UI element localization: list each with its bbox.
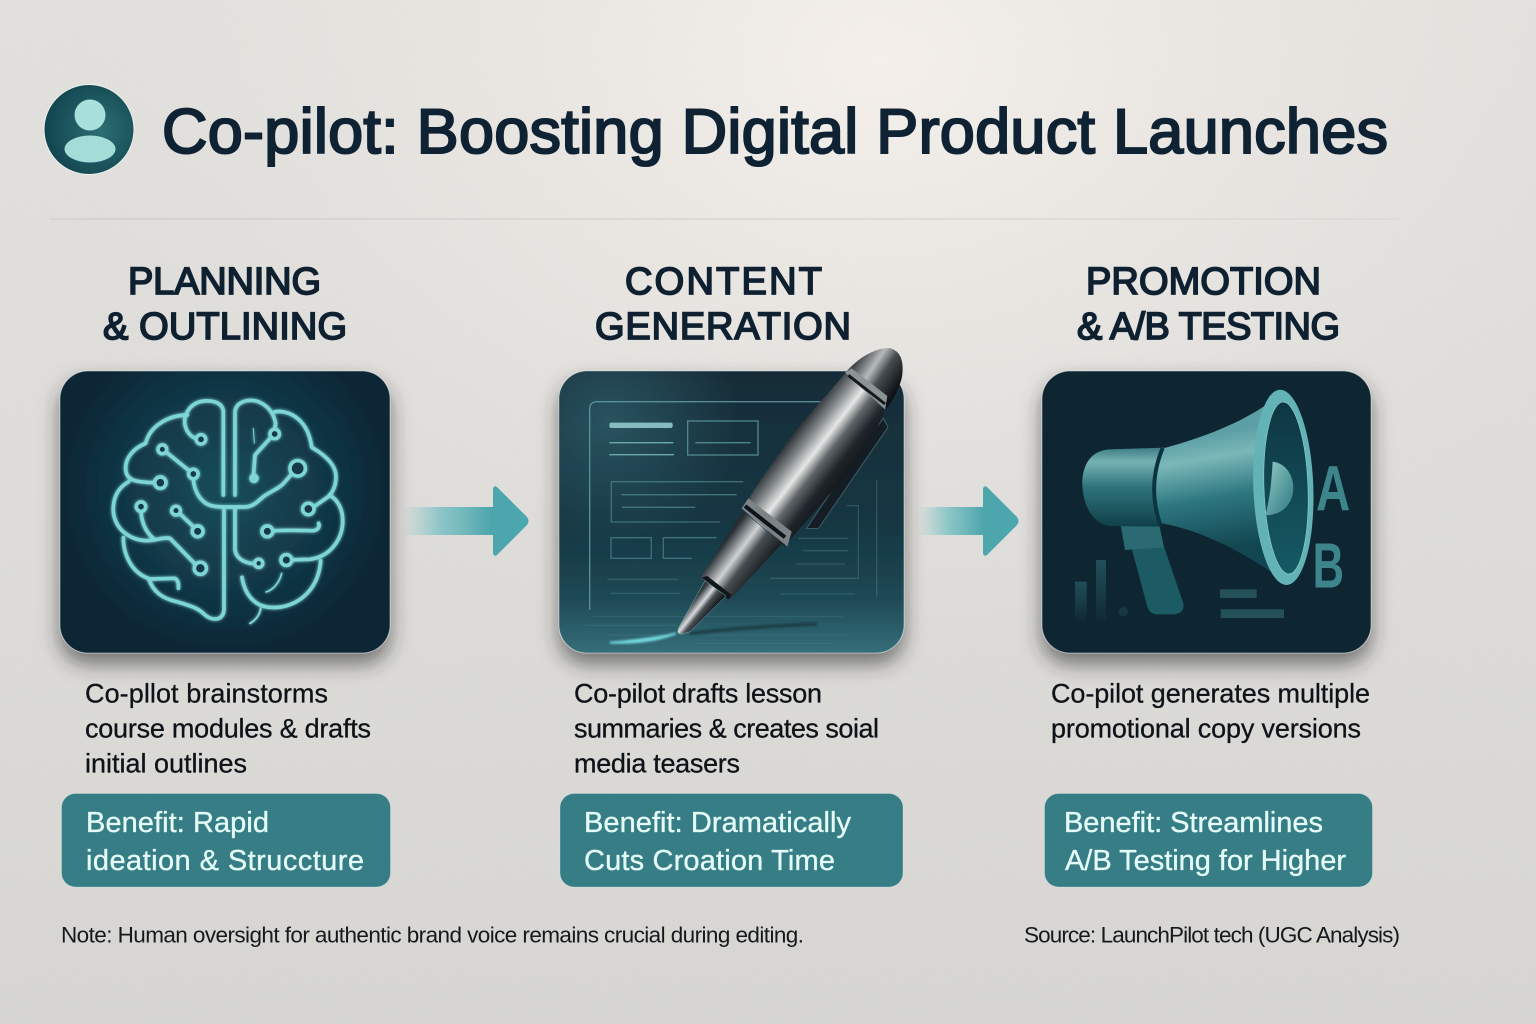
- A/B letters: [1313, 453, 1350, 601]
- title: Co-pilot: Boosting Digital Product Launches: [162, 97, 1388, 167]
- heading: planning: & OUTLINING: [103, 306, 347, 348]
- A/B letters: B: [1313, 529, 1344, 601]
- benefit: cuts creation time: Cuts Croation Time: [584, 845, 835, 877]
- icon: co-pilot avatar: [44, 84, 134, 174]
- description: content generation: [574, 678, 879, 778]
- icon: megaphone card: [1042, 371, 1371, 653]
- icon: circuit brain card: [60, 371, 390, 653]
- icon: document and pen card: [559, 348, 904, 653]
- heading: content generation: GENERATION: [595, 306, 851, 348]
- benefit: rapid ideation: ideation & Struccture: [86, 845, 364, 877]
- benefit: cuts creation time: Benefit: Dramatically: [584, 807, 852, 839]
- description: promotion: promotional copy versions: [1051, 714, 1361, 744]
- description: promotion: [1051, 678, 1370, 744]
- A/B letters: A: [1316, 453, 1350, 524]
- benefit: streamlines a/b testing: [1044, 794, 1372, 887]
- arrow: planning to content: [403, 486, 528, 556]
- heading: content generation: [595, 261, 851, 348]
- benefit: rapid ideation: [62, 794, 390, 887]
- heading: planning: [103, 261, 347, 348]
- benefit: streamlines a/b testing: A/B Testing for Higher: [1065, 845, 1346, 877]
- heading: promotion: [1077, 261, 1340, 348]
- description: promotion: Co-pilot generates multiple: [1051, 678, 1370, 708]
- description: planning: course modules & drafts: [85, 714, 371, 744]
- description: content generation: summaries & creates soial: [574, 714, 879, 744]
- description: planning: Co-pllot brainstorms: [85, 678, 328, 708]
- description: planning: initial outlines: [85, 748, 247, 778]
- description: content generation: media teasers: [574, 748, 740, 778]
- note: Note: Human oversight for authentic brand voice remains crucial during editing.: [61, 922, 804, 948]
- arrow: content to promotion: [918, 486, 1018, 556]
- panel: content generation: [559, 261, 904, 887]
- heading: content generation: CONTENT: [625, 261, 822, 303]
- benefit: cuts creation time: [560, 794, 903, 887]
- description: content generation: Co-pilot drafts lesson: [574, 678, 822, 708]
- document wireframe: [585, 402, 877, 643]
- panel: promotion and a/b testing: [1042, 261, 1372, 887]
- benefit: rapid ideation: Benefit: Rapid: [86, 807, 269, 839]
- heading: promotion: & A/B TESTING: [1077, 306, 1340, 348]
- panel: planning and outlining: [60, 261, 390, 887]
- benefit: streamlines a/b testing: Benefit: Streamlines: [1064, 807, 1323, 839]
- source: Source: LaunchPilot tech (UGC Analysis): [1024, 922, 1400, 948]
- faint chart marks: [1075, 560, 1284, 620]
- pen: [678, 348, 903, 634]
- heading: promotion: PROMOTION: [1086, 261, 1321, 303]
- heading: planning: PLANNING: [128, 261, 321, 303]
- description: planning: [85, 678, 371, 778]
